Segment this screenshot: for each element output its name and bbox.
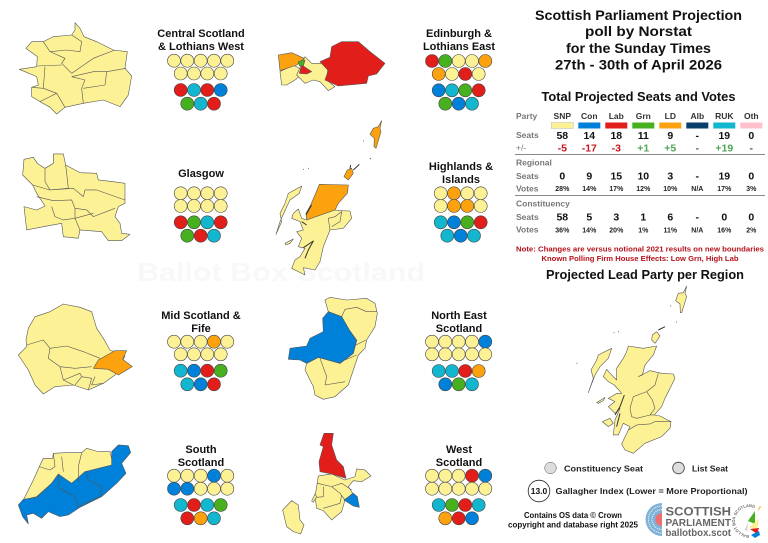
heading: West Scotland: West bbox=[446, 444, 472, 456]
heading: Highlands & Islands: Islands bbox=[442, 174, 480, 186]
heading: Mid Scotland & Fife: Fife bbox=[191, 323, 211, 335]
results table: Con bbox=[581, 111, 598, 121]
results table: +5 bbox=[664, 142, 676, 154]
results table: 14% bbox=[582, 228, 597, 234]
results table bbox=[515, 111, 765, 234]
results table: 12% bbox=[636, 186, 651, 193]
results table: 6 bbox=[667, 212, 673, 224]
results table: 17% bbox=[717, 186, 732, 193]
gallagher index bbox=[528, 480, 748, 502]
title: Scottish Parliament Projection bbox=[535, 7, 742, 23]
map: Mid Scotland and Fife bbox=[18, 304, 132, 394]
results table: - bbox=[696, 142, 700, 154]
heading: South Scotland: Scotland bbox=[178, 457, 224, 469]
results table: 0 bbox=[748, 212, 754, 224]
seat dots: Central Scotland bbox=[168, 54, 234, 110]
results table: LD bbox=[665, 111, 676, 121]
results table: -17 bbox=[582, 142, 597, 154]
results table: 36% bbox=[555, 228, 570, 234]
heading: projected lead party per region: Projected Lead Party per Region bbox=[546, 268, 744, 282]
heading: Central Scotland & Lothians West: & Lothians West bbox=[158, 41, 244, 53]
map: projected lead party bbox=[577, 286, 687, 453]
results table: - bbox=[696, 212, 700, 224]
credit text: Contains OS data © Crown bbox=[524, 511, 622, 520]
heading: Highlands & Islands: Highlands & bbox=[429, 161, 493, 173]
legend: list seat bbox=[673, 462, 728, 474]
results table: 3 bbox=[613, 212, 619, 224]
watermark: Ballot Box Scotland bbox=[137, 257, 425, 287]
results table: -5 bbox=[558, 142, 567, 154]
heading: Edinburgh & Lothians East: Edinburgh & bbox=[426, 28, 492, 40]
heading: Central Scotland & Lothians West: Central Scotland bbox=[157, 28, 245, 40]
results table: Constituency bbox=[516, 198, 570, 208]
map: Edinburgh and Lothians East bbox=[278, 42, 385, 91]
results table: -3 bbox=[612, 142, 621, 154]
logo: Scottish Parliament ballotbox.scot bbox=[646, 503, 731, 539]
results table: 10 bbox=[637, 170, 649, 182]
map: South Scotland bbox=[18, 445, 131, 524]
seat dots: Highlands bbox=[434, 187, 487, 242]
seat dots: South Scotland bbox=[168, 469, 234, 525]
heading: Glasgow: Glasgow bbox=[178, 168, 224, 180]
results table: 14% bbox=[582, 186, 597, 193]
results table: Seats bbox=[516, 212, 539, 222]
results table: 18 bbox=[610, 130, 622, 142]
map: North East Scotland bbox=[288, 297, 377, 399]
results table: Seats bbox=[516, 130, 539, 140]
title: poll by Norstat bbox=[585, 23, 692, 39]
note: Known Polling Firm House Effects: Low Grn, High Lab bbox=[542, 254, 739, 263]
results table: +19 bbox=[715, 142, 733, 154]
legend: constituency seat: Constituency Seat bbox=[564, 464, 643, 474]
seat dots: Edinburgh bbox=[426, 54, 492, 110]
gallagher index: Gallagher Index (Lower = More Proportional) bbox=[556, 486, 748, 496]
results table: 1% bbox=[638, 228, 649, 234]
results table: 19 bbox=[718, 130, 730, 142]
results table: 20% bbox=[609, 228, 624, 234]
map: Glasgow bbox=[23, 154, 130, 241]
results table: +1 bbox=[637, 142, 649, 154]
results table: N/A bbox=[691, 186, 703, 193]
heading: total projected seats and votes: Total Projected Seats and Votes bbox=[542, 90, 736, 104]
note: Note: Changes are versus notional 2021 results on new boundaries bbox=[516, 244, 764, 254]
results table: 9 bbox=[667, 130, 673, 142]
legend: constituency seat bbox=[545, 462, 643, 474]
results table: 58 bbox=[556, 130, 568, 142]
map: Highlands and Islands bbox=[276, 121, 382, 275]
results table: SNP bbox=[554, 111, 571, 121]
results table: 5 bbox=[586, 212, 592, 224]
gallagher index: 13.0 bbox=[531, 486, 548, 496]
seat dots: West Scotland bbox=[426, 469, 492, 525]
results table: 17% bbox=[609, 186, 624, 193]
results table: Oth bbox=[744, 111, 759, 121]
results table: 11% bbox=[663, 228, 678, 234]
results table: 0 bbox=[559, 170, 565, 182]
results table: 2% bbox=[746, 228, 757, 234]
results table: 0 bbox=[748, 170, 754, 182]
results table: +/- bbox=[516, 142, 526, 152]
results table: Regional bbox=[516, 158, 552, 168]
results table: Seats bbox=[516, 171, 539, 181]
results table: - bbox=[696, 130, 700, 142]
results table: 3 bbox=[667, 170, 673, 182]
results table: Alb bbox=[690, 111, 704, 121]
results table: 28% bbox=[555, 186, 570, 193]
heading: North East Scotland: North East bbox=[431, 310, 487, 322]
results table: 3% bbox=[746, 186, 757, 193]
results table: Votes bbox=[516, 184, 539, 194]
credit text: copyright and database right 2025 bbox=[508, 520, 639, 530]
results table: Lab bbox=[609, 111, 624, 121]
results table: Grn bbox=[636, 111, 651, 121]
map: Central Scotland and Lothians West bbox=[19, 23, 132, 114]
results table: 9 bbox=[586, 170, 592, 182]
map: West Scotland bbox=[283, 433, 371, 534]
logo: Ballot Box Scotland badge: BALLOT BOX SCOTLAND bbox=[732, 504, 755, 538]
results table: 14 bbox=[583, 130, 595, 142]
results table: N/A bbox=[691, 228, 703, 234]
heading: Edinburgh & Lothians East: Lothians East bbox=[423, 41, 495, 53]
heading: North East Scotland: Scotland bbox=[436, 323, 482, 335]
results table: - bbox=[696, 170, 700, 182]
logo: Scottish Parliament ballotbox.scot: SCOTTISH bbox=[666, 506, 731, 518]
results table: 0 bbox=[748, 130, 754, 142]
logo: Scottish Parliament ballotbox.scot: ballotbox.scot bbox=[666, 527, 731, 539]
results table: RUK bbox=[715, 111, 734, 121]
results table: 58 bbox=[556, 212, 568, 224]
results table: 16% bbox=[717, 228, 732, 234]
results table: Party bbox=[516, 111, 538, 121]
results table: 15 bbox=[610, 170, 622, 182]
seat dots: Glasgow bbox=[174, 187, 227, 242]
title: 27th - 30th of April 2026 bbox=[555, 56, 722, 72]
seat dots: North East bbox=[426, 335, 492, 391]
results table: 0 bbox=[721, 212, 727, 224]
results table: 1 bbox=[640, 212, 646, 224]
results table: 11 bbox=[638, 130, 649, 142]
seat dots: Mid Scotland bbox=[168, 335, 234, 391]
title: for the Sunday Times bbox=[566, 40, 711, 56]
results table: 19 bbox=[718, 170, 730, 182]
heading: West Scotland: Scotland bbox=[436, 457, 482, 469]
legend: list seat: List Seat bbox=[692, 464, 728, 474]
logo: Scottish Parliament ballotbox.scot: PARLIAMENT bbox=[666, 518, 731, 529]
heading: South Scotland: South bbox=[185, 444, 217, 456]
heading: Mid Scotland & Fife: Mid Scotland & bbox=[161, 310, 241, 322]
results table: 10% bbox=[663, 186, 678, 193]
results table: Votes bbox=[516, 224, 539, 234]
results table: - bbox=[750, 142, 754, 154]
